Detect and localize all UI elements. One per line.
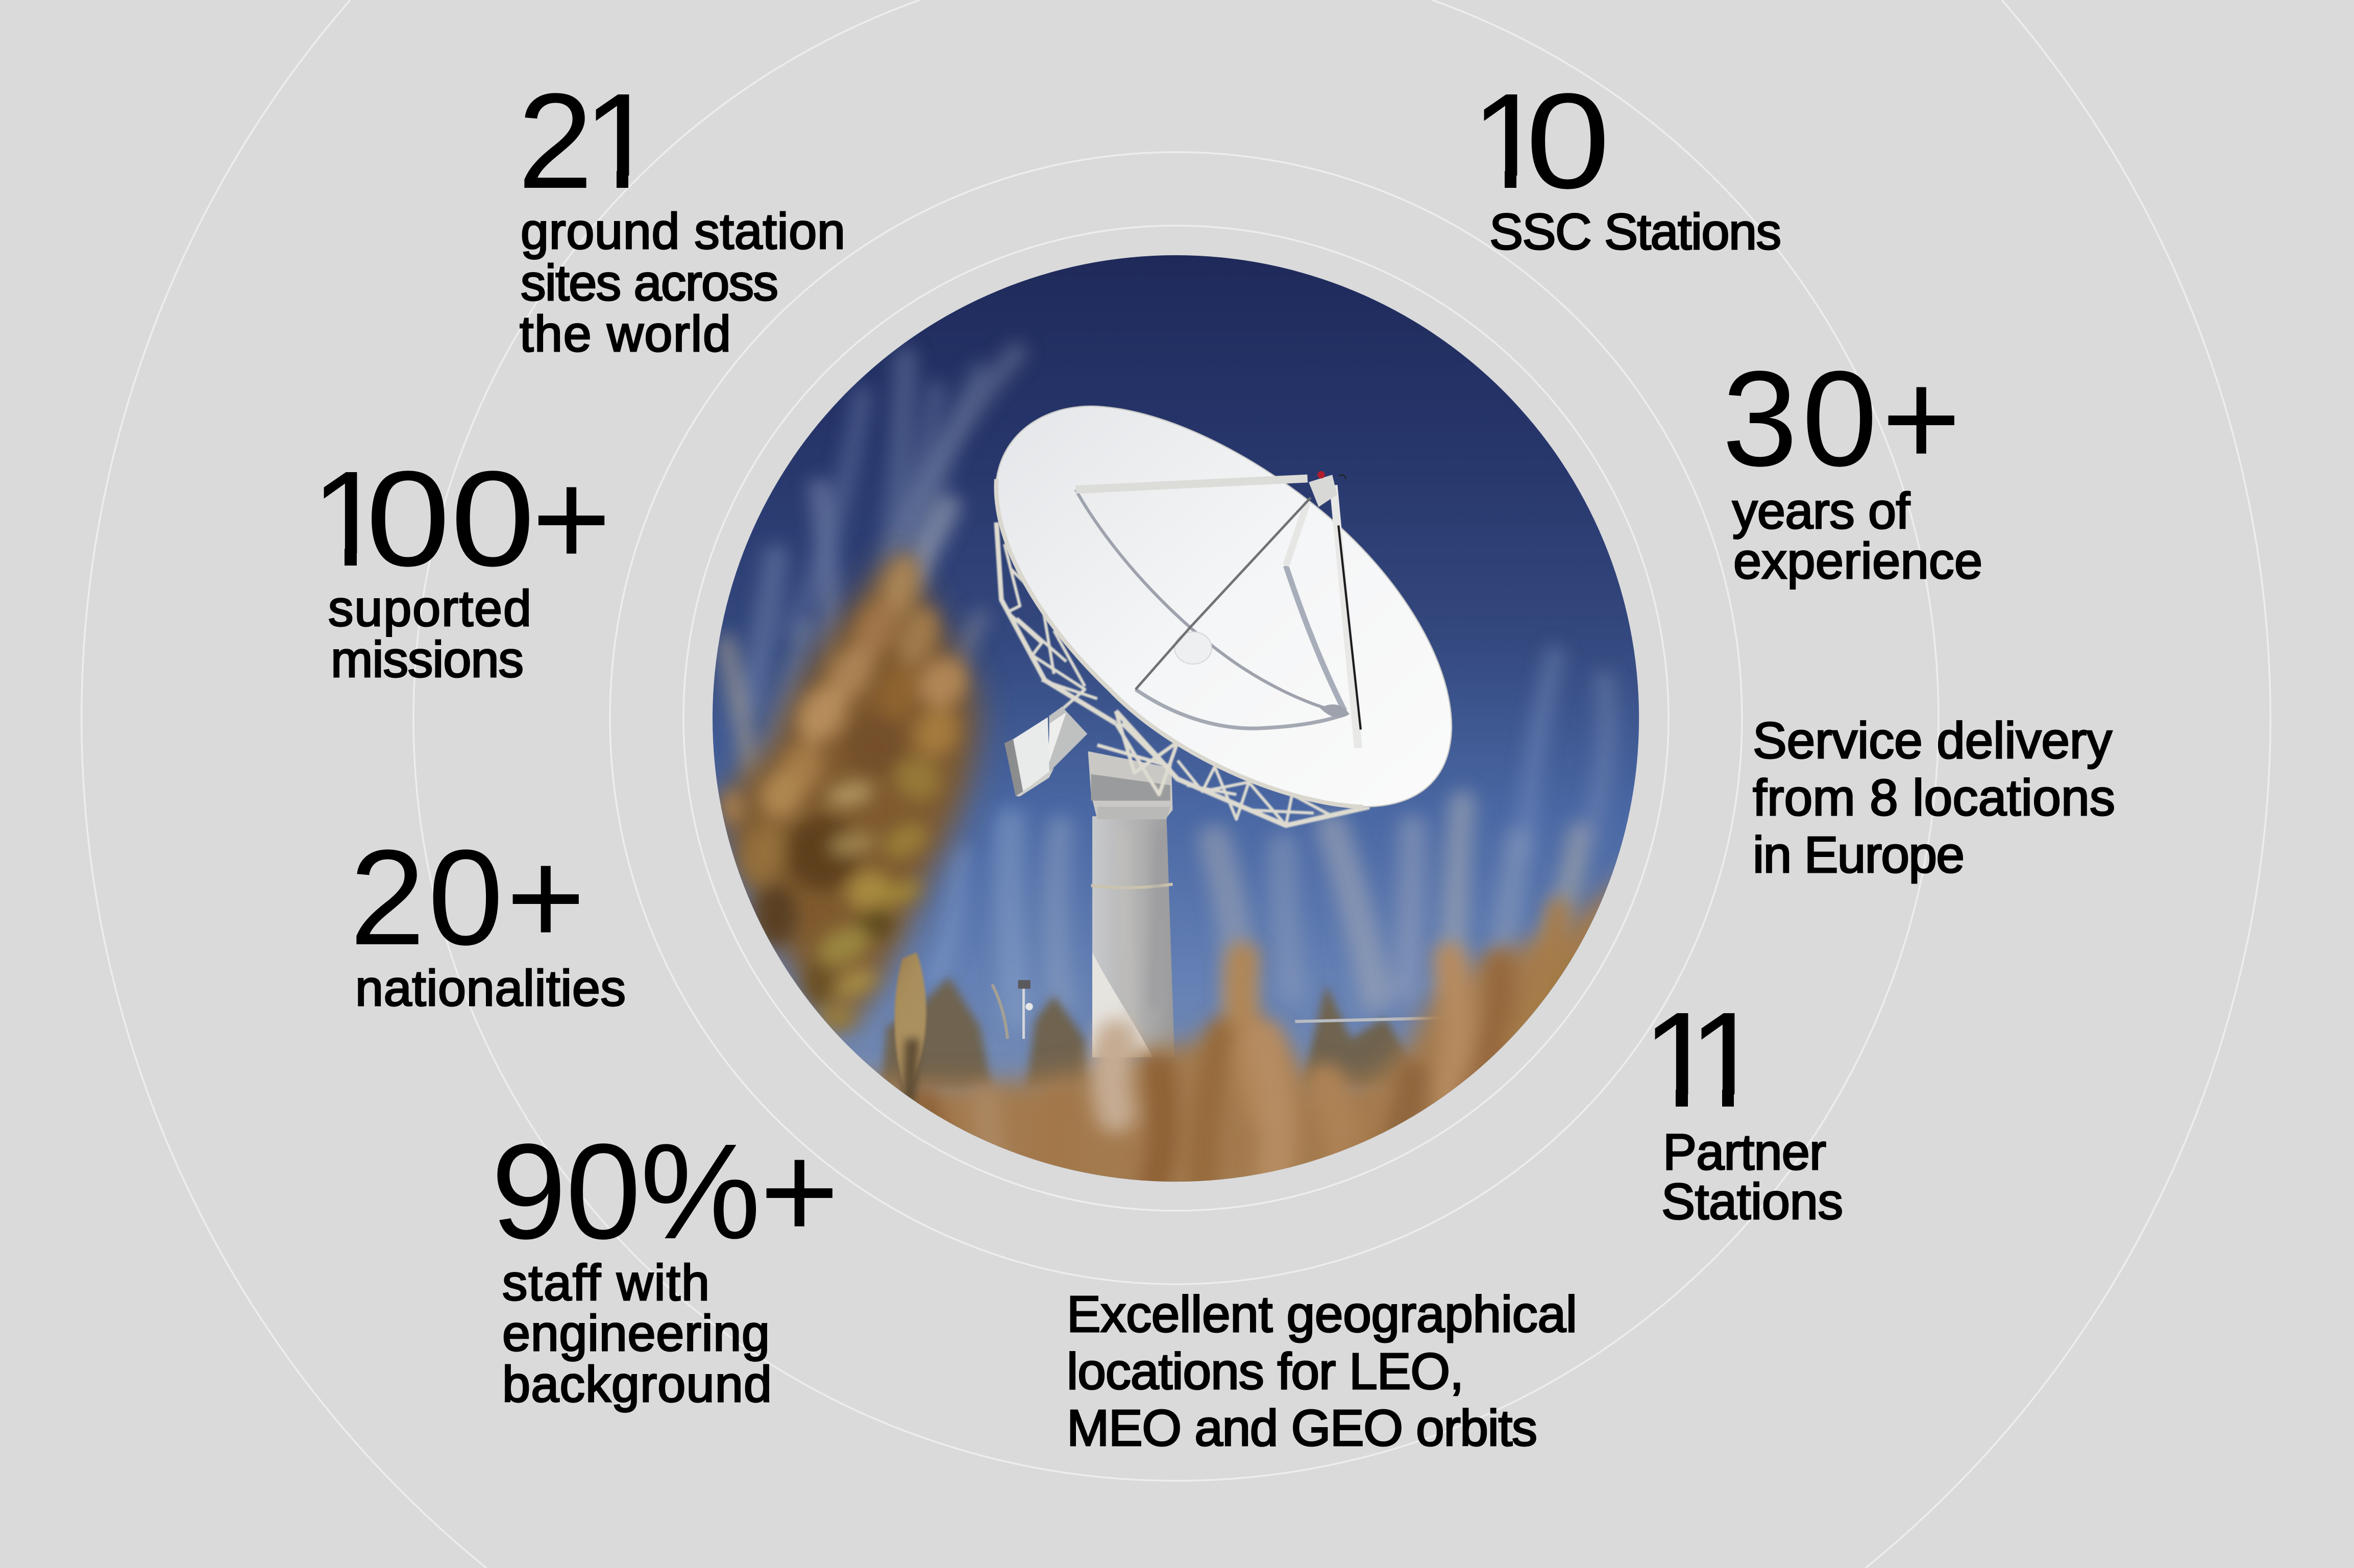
large blurred wheat ear: body [721, 550, 978, 1033]
stat: 20+ nationalities: nationalities [355, 960, 626, 1016]
stat: 10 SSC Stations [1471, 65, 1781, 260]
stat: 10 SSC Stations: SSC Stations [1489, 203, 1781, 260]
stat: 10 SSC Stations: 0 [1526, 65, 1610, 217]
stat: 90%+ staff: background [502, 1356, 772, 1412]
pedestal [1088, 751, 1174, 1058]
feed head [1309, 475, 1337, 507]
truss behind dish [996, 522, 1369, 825]
stat: 100+ missions: 0 [450, 443, 535, 595]
stat: 11 Partner Stations: 1 [1688, 984, 1764, 1136]
stat: 100+ missions: 1 [311, 443, 386, 595]
stat: 30+ years of experience: experience [1733, 532, 1982, 589]
stat: 21 ground station sites [518, 65, 845, 362]
stat: service delivery: from 8 locations [1753, 769, 2115, 826]
stat: 30+ years of experience: years of [1732, 482, 1910, 539]
stat: geographical locations: Excellent geographical [1067, 1286, 1577, 1343]
dish feed struts and shadows [1075, 475, 1361, 748]
large blurred wheat ear: grains [721, 550, 976, 1031]
sky [707, 253, 1644, 1184]
stat: 100+ missions: + [532, 443, 611, 595]
stat: 30+ years of experience: 30+ [1722, 343, 1961, 495]
pale strands across pedestal [1122, 828, 1159, 1039]
stat: 21 ground station sites: sites across [521, 254, 778, 311]
dish [996, 406, 1452, 807]
stat: service delivery: Service delivery [1753, 712, 2112, 769]
stat: service delivery: in Europe [1753, 826, 1965, 884]
stat: 30+ years of experience [1722, 343, 1982, 589]
stat: geographical locations: MEO and GEO orbits [1067, 1400, 1537, 1457]
wheat base mass [707, 853, 1654, 1199]
photo: satellite dish in wheat field [707, 253, 1654, 1199]
stat: 20+ nationalities: 20+ [350, 822, 585, 973]
stat: 10 SSC Stations: 1 [1471, 65, 1547, 217]
foreground wheat field [707, 853, 1654, 1199]
lamp post and fence [992, 980, 1450, 1039]
stat: 90%+ staff: staff with [502, 1254, 709, 1311]
stat: 21 ground station sites: 1 [583, 65, 658, 217]
stat: 21 ground station sites: the world [520, 305, 731, 362]
stat: geographical locations [1067, 1286, 1577, 1457]
stat: geographical locations: locations for LEO, [1067, 1343, 1464, 1400]
stat: 21 ground station sites: 2 [518, 65, 593, 217]
dish rim shadow [996, 479, 1363, 807]
stat: 11 Partner Stations: 1 [1642, 984, 1718, 1136]
receiver box and arm [1004, 707, 1087, 796]
stat: 100+ missions: missions [331, 631, 524, 688]
blurred grass strands in sky [726, 352, 1607, 1014]
stat: service delivery [1753, 712, 2115, 884]
distant trees [881, 977, 1419, 1088]
stat: 90%+ staff [491, 1116, 839, 1412]
stat: 21 ground station sites: ground station [521, 203, 845, 259]
in-focus wheat stalk [895, 952, 926, 1094]
stat: 90%+ staff: 90%+ [491, 1116, 839, 1267]
stat: 100+ missions: 0 [365, 443, 450, 595]
stat: 100+ missions [311, 443, 611, 688]
stat: 100+ missions: suported [328, 580, 531, 636]
stat: 11 Partner Stations: Stations [1661, 1173, 1843, 1230]
stat: 11 Partner Stations: Partner [1663, 1123, 1826, 1180]
blurred wheat stalks [924, 909, 1580, 1187]
stat: 90%+ staff: engineering [502, 1305, 770, 1361]
stat: 20+ nationalities [350, 822, 626, 1016]
stat: 11 Partner Stations [1642, 984, 1843, 1230]
